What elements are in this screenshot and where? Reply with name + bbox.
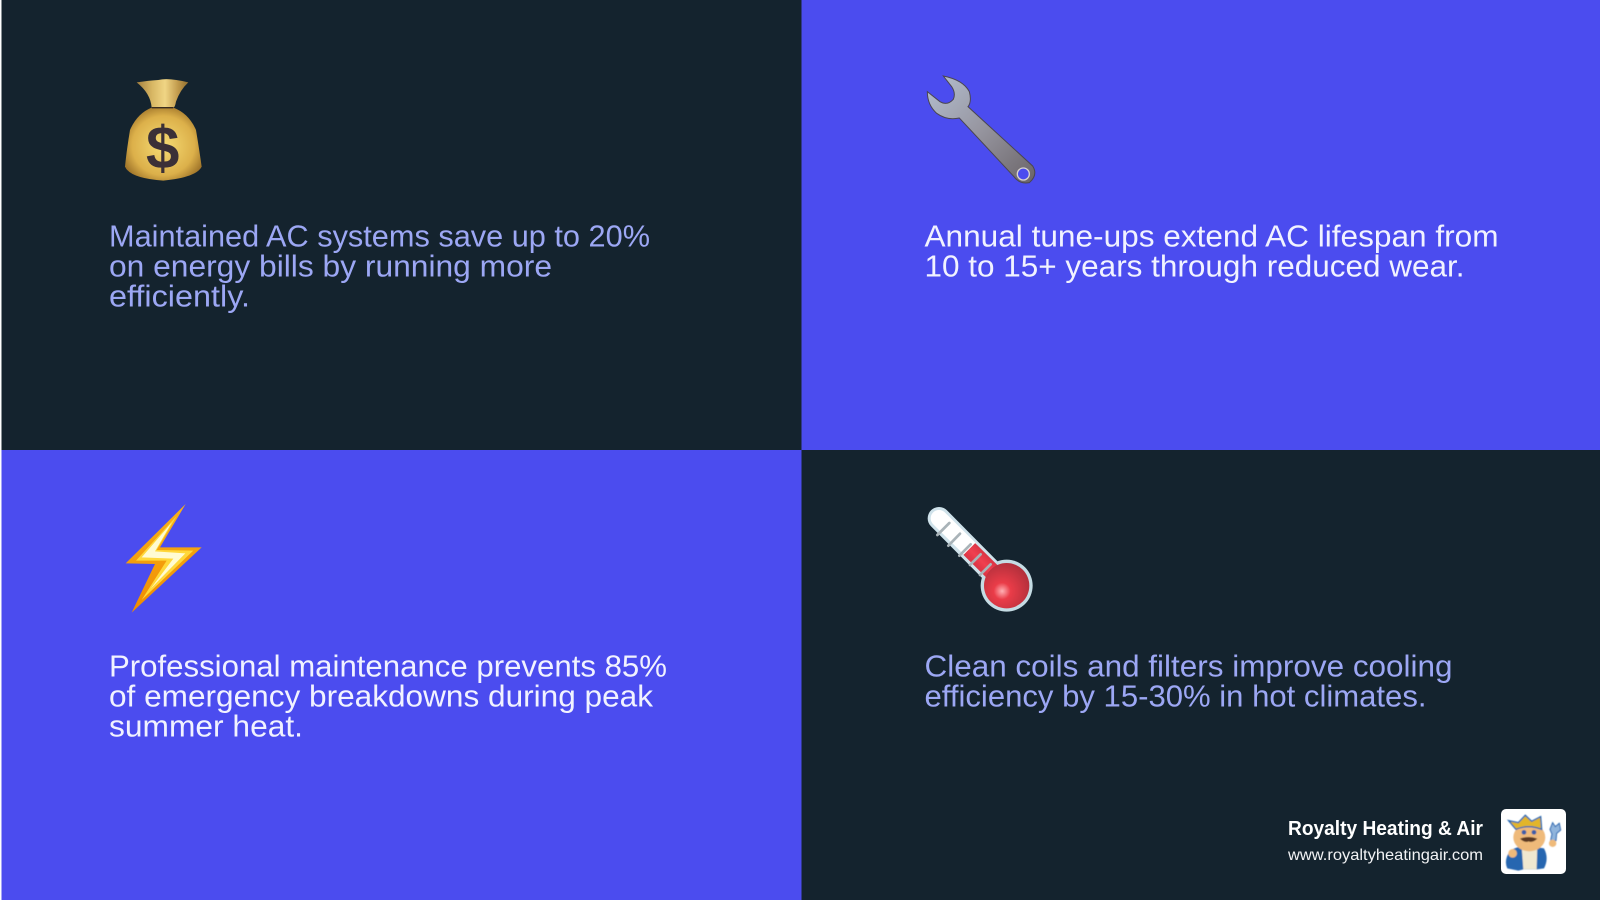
panel: energy savings (2, 0, 802, 450)
text: lifespan: Annual tune-ups extend AC lifespan from (924, 218, 1498, 254)
text: energy savings: efficiently. (109, 278, 250, 314)
brand footer (1287, 809, 1566, 874)
panel: breakdown prevention (2, 450, 802, 900)
panel: lifespan (802, 0, 1600, 450)
icon: money bag (125, 79, 202, 182)
company name: Royalty Heating & Air (1288, 818, 1483, 840)
text: breakdown prevention: Professional maintenance prevents 85% (109, 648, 667, 684)
icon: wrench (927, 76, 1035, 183)
text: energy savings: on energy bills by running more (109, 248, 552, 284)
website: www.royaltyheatingair.com (1287, 847, 1483, 864)
text: breakdown prevention: of emergency breakdowns during peak (109, 678, 653, 714)
icon: lightning bolt (126, 504, 202, 613)
text: cooling efficiency: efficiency by 15-30% in hot climates. (924, 678, 1426, 714)
icon: thermometer (937, 518, 1033, 612)
text: lifespan: 10 to 15+ years through reduced wear. (924, 248, 1464, 284)
text: cooling efficiency: Clean coils and filters improve cooling (924, 648, 1452, 684)
text: breakdown prevention: summer heat. (109, 708, 303, 744)
logo: mascot (1501, 809, 1566, 874)
panel: cooling efficiency (802, 450, 1600, 900)
icon: money bag: $ (146, 115, 179, 182)
text: energy savings: Maintained AC systems save up to 20% (109, 218, 650, 254)
